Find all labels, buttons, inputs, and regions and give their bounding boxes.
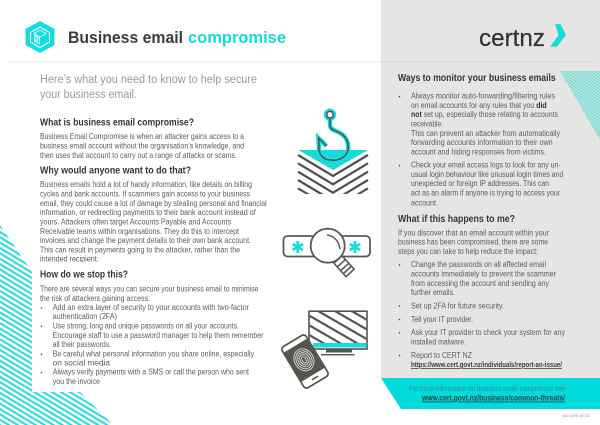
intro text [40,74,257,101]
heading: how do we stop this: How do we stop this? [40,270,128,281]
text block: what to do: installed malware. [411,338,466,346]
text block: how to stop: the risk of attackers gaining access: [40,294,150,303]
text block: monitoring list: Always monitor auto-forwarding/filtering rules [411,92,555,100]
text block: monitoring list: account and hiding responses from victims. [411,148,546,156]
text block: definition: business email account without the organisation’s knowledge, and [40,142,244,150]
footer reference code: 4502 CERT OCT20 [562,414,590,418]
text block: why: email, they could cause a lot of damage by stealing personal and financial [40,199,267,208]
text block: what to do: further emails. [411,288,455,297]
text block: how to stop: you the invoice [53,377,100,386]
hatch pattern top right [560,71,600,140]
text block: why: invoices and change the payment details to their own bank account. [40,236,251,245]
heading: what if this happens: What if this happens to me? [398,214,515,225]
text block: monitoring list: forwarding accounts information to their own [411,138,553,147]
text block: monitoring list: receivable. [411,120,443,128]
logo: certnz: certnz [479,25,545,52]
text block: how to stop: authentication (2FA) [53,312,117,321]
text block: how to stop: all their passwords. [53,340,111,349]
heading: what is business email compromise: What is business email compromise? [40,118,194,129]
text block: monitoring list: unexpected or foreign IP addresses. This can [411,179,549,188]
text block: definition: then uses that account to carry out a range of attacks or scams. [40,151,237,160]
text block: what to do: Tell your IT provider. [411,315,473,324]
icon: fishing hook and envelope [298,108,368,194]
text block: why: yours. Attackers often target Accounts Payable and Accounts [40,218,231,226]
text block: why: Business emails hold a lot of handy information, like details on billing [40,180,252,189]
text block: why: cycles and bank accounts. If scammers gain access to your business [40,190,250,198]
text block: why: This can result in payments going to the attacker, rather than the [40,246,240,254]
text block: monitoring list: usual login behaviour like unusual login times and [411,170,563,179]
text block: monitoring list: Check your email access logs to look for any un- [411,160,561,170]
text block: monitoring list: account. [411,198,438,208]
heading: why would anyone: Why would anyone want to do that? [40,166,191,177]
text block: how to stop: Use strong, long and unique passwords on all your accounts. [53,322,239,330]
text block: what to do: Report to CERT NZ [411,351,472,360]
text block: what to do: Set up 2FA for future security. [411,302,504,310]
text block: what to do: https://www.cert.govt.nz/individuals/report-an-issue/ [411,360,563,369]
text block: how to stop: Always verify payments with a SMS or call the person who sent [53,368,250,376]
text block: how to stop [40,284,264,386]
text block: how to stop: Encourage staff to use a password manager to help them remember [53,331,264,340]
title: Business email [68,29,183,47]
icon: password magnifying glass [284,229,370,277]
text block: what to do: steps you can take to help reduce the impact: [398,247,538,256]
text block: how to stop: on social media [53,358,111,368]
text block: what to do: Ask your IT provider to check your system for any [411,328,565,337]
text block: why: Receivable teams within organisations. They do this to intercept [40,227,240,236]
text block: monitoring list: act as an alarm if anyone is trying to access your [411,188,560,198]
text block: what to do: Change the passwords on all affected email [411,260,546,269]
header divider [8,62,381,63]
text block: how to stop: There are several ways you can secure your business email to minimise [40,284,258,294]
text block: what to do: If you discover that an email account within your [398,228,549,238]
text block: how to stop: Add an extra layer of security to your accounts with two-factor [53,303,249,312]
text block: definition [40,132,245,160]
text block: how to stop: Be careful what personal information you share online, especially [53,350,254,358]
text block: why: information, or redirecting payments to their bank account instead of [40,208,256,217]
text block: monitoring list: This can prevent an attacker from automatically [411,129,560,138]
text block: why: intended recipient. [40,255,99,264]
panel: grey sidebar [381,0,600,378]
title: compromise [188,29,286,47]
text block: definition: Business Email Compromise is when an attacker gains access to a [40,132,245,141]
panel: teal footer banner [381,378,600,409]
hatch pattern bottom left [0,225,113,425]
icon: monitor and fingerprint phone [281,311,367,389]
text block: monitoring list [399,92,563,208]
text block: what to do: accounts immediately to prevent the scammer [411,270,556,278]
intro text: Here’s what you need to know to help secure [40,74,257,86]
panel: teal footer banner: For more information on business email compromise see [409,384,565,393]
panel: teal footer banner: www.cert.govt.nz/business/common-threats/ [421,392,566,402]
text block: monitoring list: not set up, especially those relating to accounts [411,110,558,119]
text block: what to do: from accessing the account and sending any [411,279,549,288]
text block: what to do: business has been compromised, there are some [398,238,548,247]
text block: monitoring list: on email accounts for any rules that you did [411,101,547,110]
heading: ways to monitor: Ways to monitor your business emails [398,73,556,84]
text block: why [40,180,267,264]
intro text: your business email. [40,89,137,101]
icon: teal hexagon logo [26,21,54,53]
text block: what to do [398,228,565,369]
